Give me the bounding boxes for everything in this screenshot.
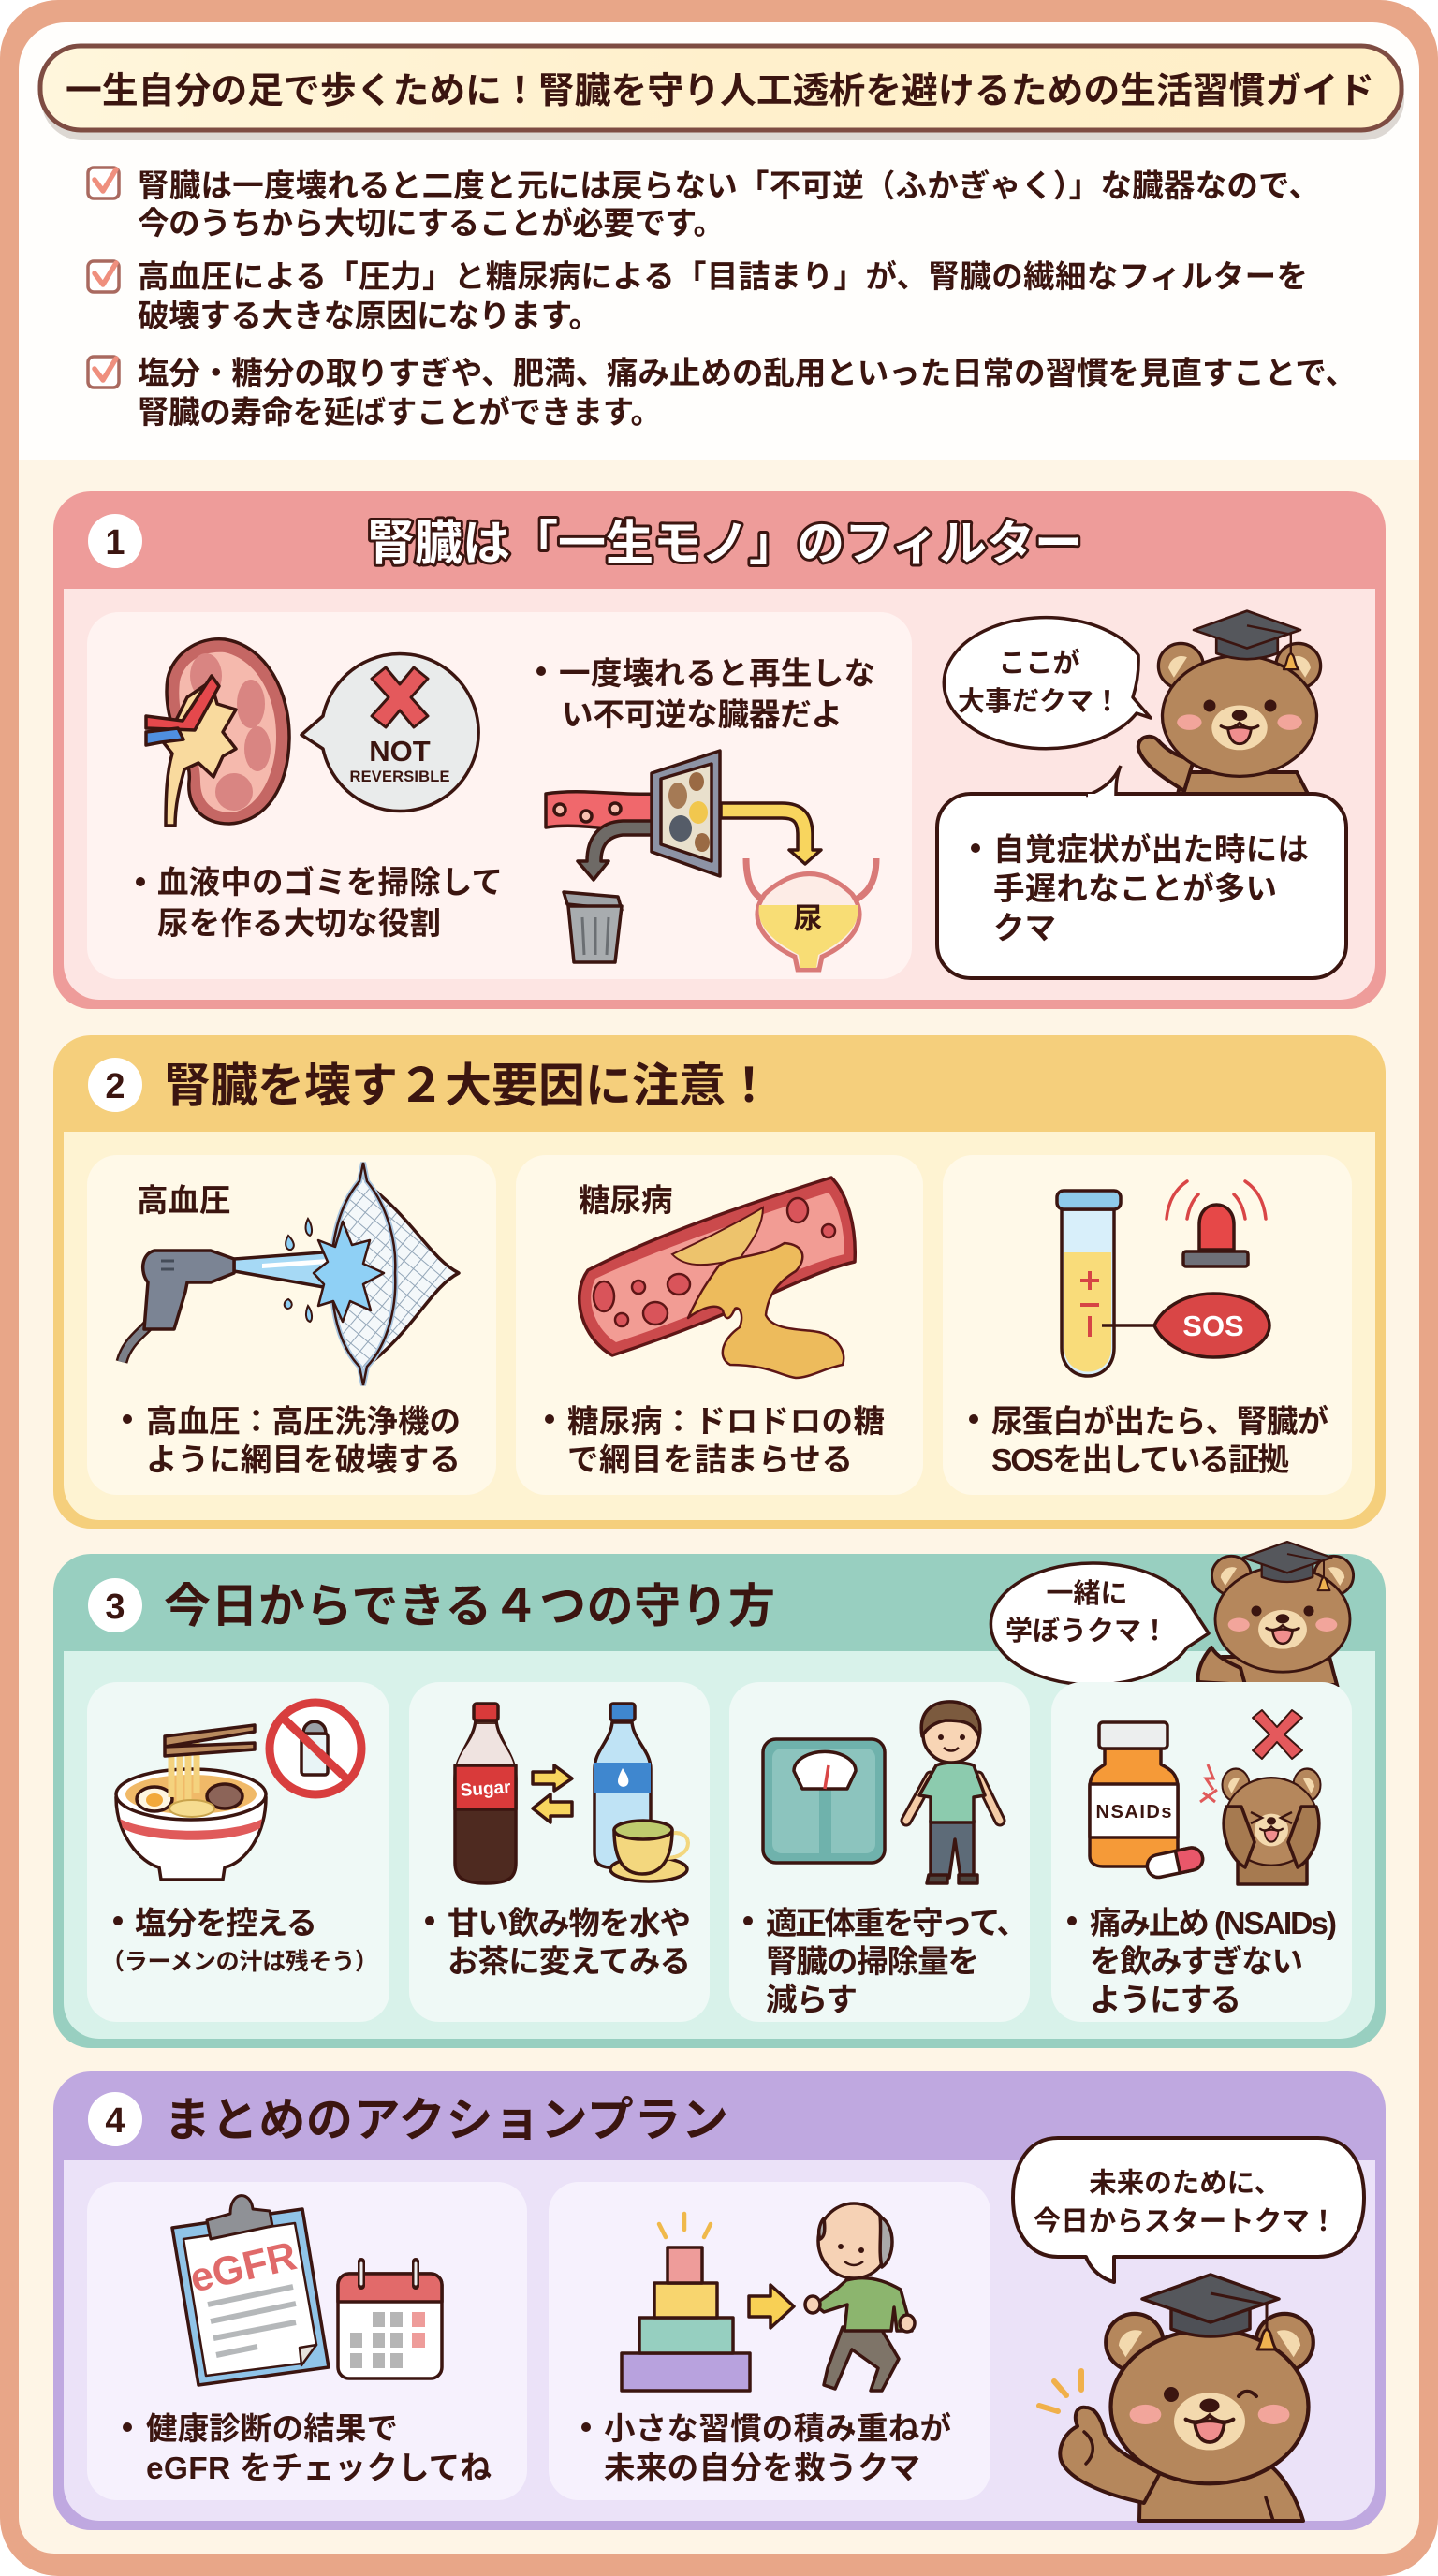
bullet 2: 破壊する大きな原因になります。 (138, 300, 600, 334)
card: kidney role (87, 612, 912, 979)
bullet 1 (88, 168, 1320, 242)
bear 1 (1138, 611, 1321, 794)
icon: elderly man walking (805, 2203, 915, 2391)
bear 3 (1198, 1542, 1354, 1685)
text: irreversible organ: 一度壊れると再生しな (559, 657, 875, 692)
speech bubble: symptoms: 自覚症状が出た時には (993, 832, 1309, 868)
heading 2: 腎臓を壊す２大要因に注意！ (164, 1060, 772, 1112)
bullet 3: 腎臓の寿命を延ばすことができます。 (138, 395, 662, 431)
text (969, 1404, 1328, 1478)
heading 4: まとめのアクションプラン (164, 2094, 728, 2146)
bullet 3 (88, 357, 1357, 431)
card: proteinuria (943, 1155, 1352, 1495)
label: 糖尿病 (579, 1184, 672, 1219)
speech bubble: ここが大事だクマ: 大事だクマ！ (958, 686, 1121, 717)
card: eGFR check (87, 2182, 527, 2500)
text: irreversible organ (536, 657, 875, 733)
icon: arrow (749, 2285, 794, 2328)
intro bullet list (88, 168, 1357, 431)
icon: water bottle (594, 1704, 651, 1868)
content background (19, 460, 1419, 2554)
number badge 1 (88, 514, 142, 568)
text: 痛み止め (NSAIDs) (1090, 1907, 1337, 1941)
text: 健康診断の結果で (146, 2412, 398, 2447)
icon: clipboard (172, 2196, 329, 2385)
card: diabetes (516, 1155, 923, 1495)
number badge 1: 1 (105, 523, 125, 563)
icon: not reversible bubble: NOT (369, 735, 431, 768)
icon: bear with headache (1200, 1764, 1320, 1884)
bullet 1: 今のうちから大切にすることが必要です。 (138, 206, 725, 242)
text: を飲みすぎない (1090, 1945, 1303, 1980)
icon: not reversible bubble (301, 653, 478, 812)
filter frame (652, 751, 720, 876)
icon: calendar (338, 2261, 442, 2378)
speech bubble: 未来のために: 今日からスタートクマ！ (1034, 2206, 1337, 2237)
speech bubble: ここが大事だクマ: ここが (998, 647, 1080, 679)
icon: not reversible bubble: REVERSIBLE (350, 768, 449, 785)
panel 1: kidney filter (53, 491, 1386, 1009)
text: 塩分を控える (135, 1907, 317, 1941)
card: small habits (549, 2182, 990, 2500)
text: 腎臓の掃除量を (766, 1945, 979, 1980)
text: 適正体重を守って、 (766, 1907, 1028, 1941)
panel 2: two causes (53, 1035, 1386, 1529)
speech bubble: symptoms (937, 766, 1346, 978)
text: 未来の自分を救うクマ (604, 2452, 920, 2486)
heading 3: 今日からできる４つの守り方 (164, 1580, 775, 1632)
icon: kidney (146, 639, 289, 826)
text: SOSを出している証拠 (991, 1443, 1289, 1478)
card: painkillers (1051, 1682, 1352, 2022)
text (425, 1907, 691, 1980)
card: reduce salt (87, 1682, 389, 2022)
icon: test tube (1057, 1191, 1155, 1376)
text: eGFR をチェックしてね (146, 2452, 492, 2486)
text: role of kidney (136, 865, 503, 942)
icon: clogged vessel (580, 1178, 855, 1378)
title banner (40, 46, 1404, 140)
speech bubble: symptoms: 手遅れなことが多い (993, 871, 1277, 907)
text: 小さな習慣の積み重ねが (604, 2411, 951, 2447)
text (1067, 1907, 1337, 2018)
text (545, 1405, 885, 1478)
number badge 3: 3 (105, 1588, 125, 1627)
card: swap sweet drinks (409, 1682, 710, 2022)
bullet 3: 塩分・糖分の取りすぎや、肥満、痛み止めの乱用といった日常の習慣を見直すことで、 (138, 357, 1357, 391)
heading 1: 腎臓は「一生モノ」のフィルター (367, 517, 1082, 570)
panel 3: four protections (53, 1542, 1386, 2048)
icon: cola bottle: Sugar (460, 1778, 512, 1801)
bladder: 尿 (794, 902, 822, 935)
number badge 4 (88, 2092, 142, 2146)
text: 甘い飲み物を水や (448, 1907, 691, 1941)
icon: clipboard: eGFR (186, 2233, 301, 2302)
bullet 2 (88, 259, 1308, 334)
diagram: blood filter (546, 751, 876, 970)
number badge 2: 2 (105, 1067, 125, 1106)
card: hypertension (87, 1155, 496, 1495)
speech bubble: 一緒に学ぼうクマ (990, 1563, 1209, 1685)
icon: person (906, 1702, 1000, 1883)
bladder (746, 858, 876, 970)
text: 尿蛋白が出たら、腎臓が (991, 1404, 1328, 1440)
intro background (19, 22, 1419, 460)
icon: swap arrows (533, 1765, 572, 1822)
icon: stacked blocks (622, 2214, 750, 2391)
icon: scale (763, 1739, 885, 1863)
bear 4 with thumbs up (1039, 2275, 1313, 2521)
icon: X mark (1253, 1710, 1302, 1759)
speech bubble: 未来のために (1013, 2138, 1364, 2282)
panel 4: action plan (53, 2071, 1386, 2530)
text: 高血圧：高圧洗浄機の (146, 1405, 461, 1440)
text (101, 1907, 378, 1975)
speech bubble: 一緒に学ぼうクマ: 学ぼうクマ！ (1005, 1616, 1168, 1647)
text: irreversible organ: い不可逆な臓器だよ (562, 698, 843, 733)
text (123, 1405, 461, 1478)
gray arrow (578, 821, 660, 880)
icon: no salt sign (270, 1703, 361, 1794)
number badge 3 (88, 1578, 142, 1632)
icon: tea cup (610, 1821, 688, 1881)
text: ように網目を破壊する (146, 1443, 461, 1478)
bullet 2: 高血圧による「圧力」と糖尿病による「目詰まり」が、腎臓の繊細なフィルターを (138, 259, 1308, 295)
icon: capsule (1145, 1846, 1205, 1880)
number badge 4: 4 (105, 2101, 125, 2141)
text: ようにする (1090, 1983, 1241, 2018)
label: 高血圧 (137, 1184, 230, 1219)
blood vessel (546, 792, 655, 830)
text: 糖尿病：ドロドロの糖 (567, 1405, 885, 1440)
text (743, 1907, 1028, 2018)
icon: ramen (116, 1725, 266, 1880)
icon: SOS balloon: SOS (1182, 1310, 1244, 1342)
title banner: 一生自分の足で歩くために！腎臓を守り人工透析を避けるための生活習慣ガイド (66, 71, 1374, 111)
icon: SOS balloon (1154, 1294, 1269, 1357)
text: role of kidney: 血液中のゴミを掃除して (157, 865, 503, 900)
icon: siren (1167, 1181, 1266, 1266)
text: （ラーメンの汁は残そう） (101, 1948, 378, 1975)
card: healthy weight (729, 1682, 1030, 2022)
speech bubble: 未来のために: 未来のために、 (1089, 2168, 1282, 2199)
text (581, 2411, 951, 2486)
text: 減らす (766, 1983, 858, 2018)
speech bubble: 一緒に学ぼうクマ: 一緒に (1046, 1578, 1128, 1609)
text: お茶に変えてみる (448, 1945, 691, 1980)
trash can (564, 892, 622, 962)
icon: pressure washer hitting net (122, 1163, 459, 1385)
text: で網目を詰まらせる (567, 1443, 853, 1478)
speech bubble: ここが大事だクマ (944, 618, 1151, 749)
icon: NSAIDs bottle: NSAIDs (1095, 1802, 1172, 1822)
speech bubble: symptoms: クマ (993, 912, 1056, 946)
text: role of kidney: 尿を作る大切な役割 (157, 907, 441, 942)
icon: NSAIDs bottle (1090, 1722, 1178, 1866)
text (123, 2412, 492, 2486)
number badge 2 (88, 1058, 142, 1112)
icon: cola bottle (455, 1704, 516, 1883)
bullet 1: 腎臓は一度壊れると二度と元には戻らない「不可逆（ふかぎゃく）」な臓器なので、 (138, 169, 1320, 204)
yellow arrow (721, 803, 821, 864)
